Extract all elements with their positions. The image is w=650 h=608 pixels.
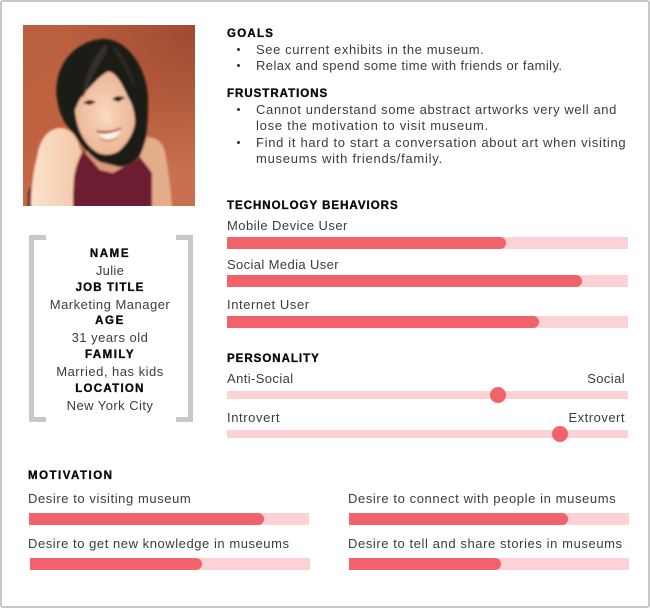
location label: LOCATION xyxy=(75,383,145,395)
heading: goals: GOALS xyxy=(227,28,274,40)
family value: Married, has kids xyxy=(56,364,164,379)
label: social: Social xyxy=(587,371,625,386)
bar: desire to tell and share stories xyxy=(349,558,629,570)
left bracket xyxy=(29,235,46,422)
label: internet user: Internet User xyxy=(227,297,310,312)
family label: FAMILY xyxy=(85,349,135,361)
slider: anti-social to social xyxy=(227,391,628,399)
heading: personality: PERSONALITY xyxy=(227,353,320,365)
heading: frustrations: FRUSTRATIONS xyxy=(227,88,328,100)
job title value: Marketing Manager xyxy=(50,297,170,312)
right bracket xyxy=(176,235,193,422)
frustration 2: Find it hard to start a conversation about art when visiting xyxy=(256,135,626,150)
bar: internet user xyxy=(227,316,628,328)
bar: desire to connect xyxy=(349,513,629,525)
age label: AGE xyxy=(95,315,125,327)
bar: mobile device user xyxy=(227,237,628,249)
bar: desire to visiting museum xyxy=(29,513,309,525)
goals list xyxy=(256,42,562,73)
label: social media user: Social Media User xyxy=(227,257,339,272)
frustrations list xyxy=(256,102,626,166)
frustrations list: museums with friends/family. xyxy=(256,151,443,166)
label: desire to visiting museum: Desire to visiting museum xyxy=(28,491,191,506)
frustrations list: lose the motivation to visit museum. xyxy=(256,118,489,133)
job title label: JOB TITLE xyxy=(76,282,144,294)
label: introvert: Introvert xyxy=(227,410,280,425)
location value: New York City xyxy=(67,398,153,413)
photo of Julie xyxy=(23,25,195,206)
label: anti-social: Anti-Social xyxy=(227,371,294,386)
name label: NAME xyxy=(90,248,130,260)
heading: technology behaviors: TECHNOLOGY BEHAVIORS xyxy=(227,200,399,212)
label: desire to get new knowledge: Desire to get new knowledge in museums xyxy=(28,536,290,551)
bar: social media user xyxy=(227,275,628,287)
identity card xyxy=(29,235,193,422)
goal 1: See current exhibits in the museum. xyxy=(256,42,484,57)
label: desire to connect: Desire to connect with people in museums xyxy=(348,491,616,506)
frustration 1: Cannot understand some abstract artworks very well and xyxy=(256,102,617,117)
bar: desire to get new knowledge xyxy=(30,558,310,570)
name value: Julie xyxy=(96,263,124,278)
goal 2: Relax and spend some time with friends or family. xyxy=(256,58,562,73)
heading: motivation: MOTIVATION xyxy=(28,470,113,482)
label: desire to tell and share stories: Desire to tell and share stories in museums xyxy=(348,536,623,551)
age value: 31 years old xyxy=(72,330,148,345)
label: extrovert: Extrovert xyxy=(568,410,625,425)
label: mobile device user: Mobile Device User xyxy=(227,218,348,233)
slider: introvert to extrovert xyxy=(227,430,628,438)
